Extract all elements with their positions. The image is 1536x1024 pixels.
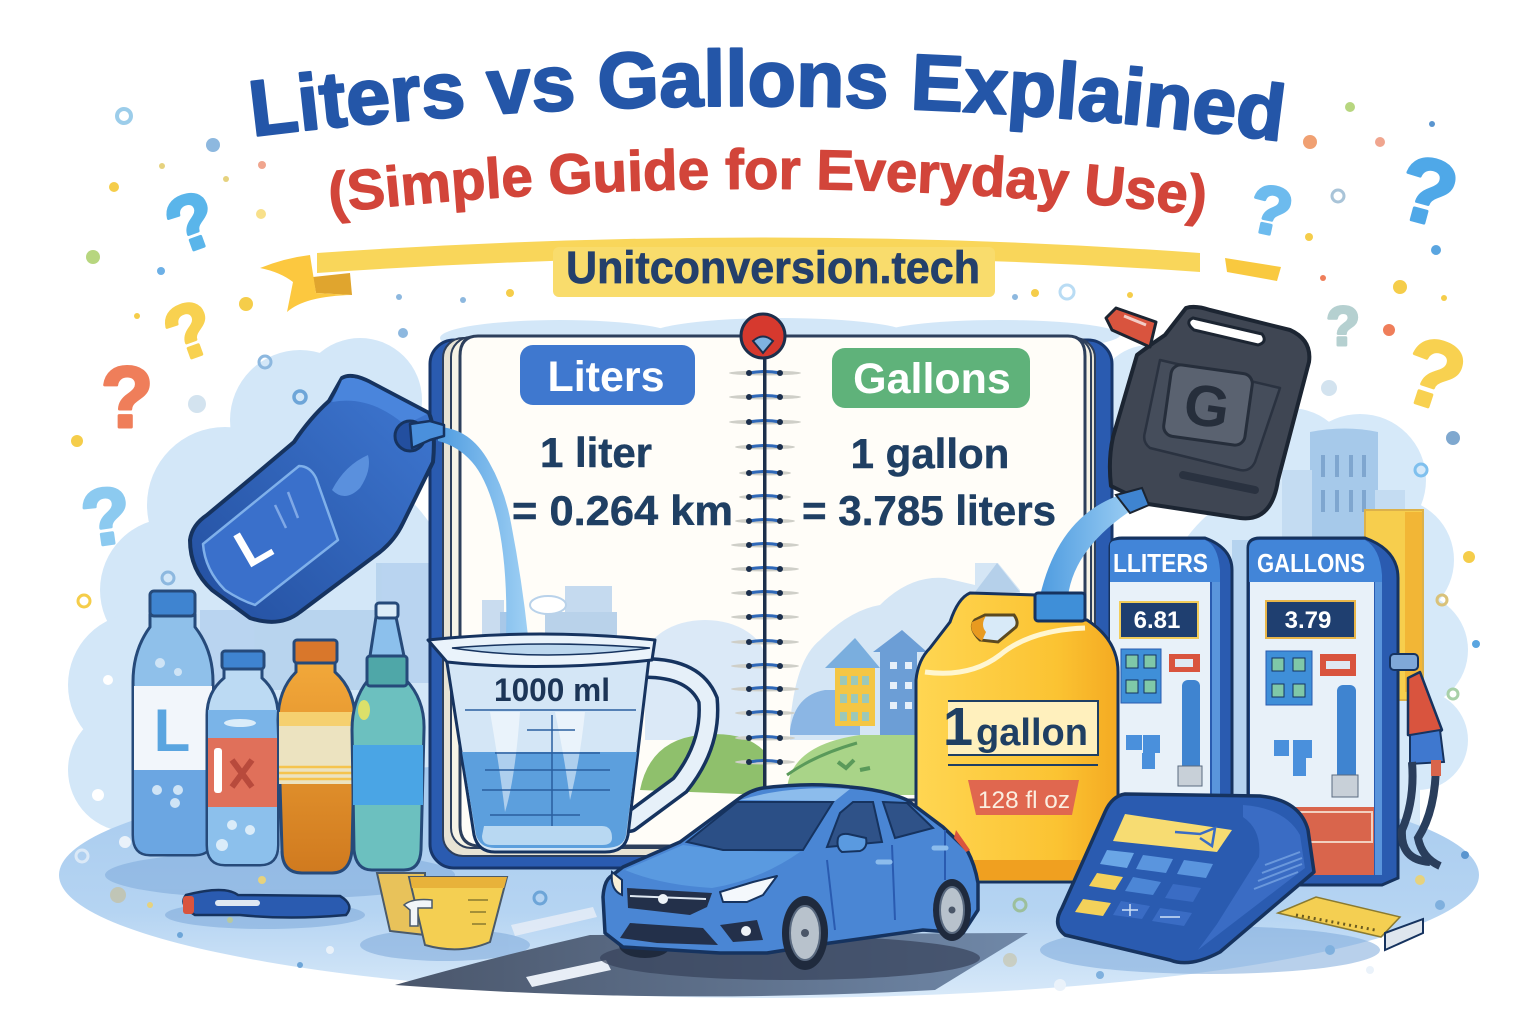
liter equation xyxy=(512,429,733,534)
road markings xyxy=(511,907,611,987)
Liters badge xyxy=(520,345,695,405)
letter L on jug: L xyxy=(225,513,282,579)
door lines xyxy=(827,830,945,930)
blue strap tool xyxy=(183,890,349,918)
background wash: right cloud xyxy=(1095,345,1468,840)
display xyxy=(1120,602,1198,638)
water xyxy=(462,752,637,848)
page stack xyxy=(443,338,1095,856)
spiral binding xyxy=(729,352,801,797)
fuel pump: gallons xyxy=(1248,538,1398,885)
roof highlight xyxy=(740,788,850,801)
question marks xyxy=(76,135,1477,564)
road xyxy=(395,933,1028,996)
calculator xyxy=(1058,794,1314,963)
128 fl oz tag: 128 fl oz xyxy=(978,787,1070,814)
display: 6.81 xyxy=(1134,607,1180,634)
red bookmark pin xyxy=(741,314,785,358)
fuel pump: liters xyxy=(1110,538,1232,830)
yellow measuring cups xyxy=(377,873,507,949)
red cap xyxy=(1106,308,1156,347)
G letter: G xyxy=(1180,371,1234,442)
screen xyxy=(1113,814,1232,852)
ribbon banner xyxy=(260,238,1281,312)
liter equation: = 0.264 km xyxy=(512,487,733,534)
side windows xyxy=(827,802,933,847)
headlight xyxy=(720,876,777,902)
title: Liters vs Gallons Explained xyxy=(250,47,1284,142)
ground xyxy=(59,752,1479,998)
mirror xyxy=(838,834,866,852)
windshield xyxy=(687,802,833,850)
measuring cup: 1000 ml xyxy=(494,672,610,708)
question marks: ? xyxy=(1326,295,1360,357)
display xyxy=(1266,601,1355,638)
Liters badge: Liters xyxy=(547,353,665,401)
handle xyxy=(630,668,708,822)
fuel nozzle and hose xyxy=(1390,654,1444,866)
background wash: left cloud xyxy=(68,338,460,840)
ground shadows xyxy=(105,851,1380,974)
128 fl oz tag xyxy=(968,780,1079,815)
scattered confetti dots xyxy=(71,102,1480,991)
water stream from blue jug xyxy=(438,427,528,636)
open page xyxy=(460,336,1085,846)
front wheel xyxy=(782,896,828,970)
far-side tire xyxy=(619,932,671,958)
question marks: ? xyxy=(154,172,229,271)
question marks: ? xyxy=(1243,169,1299,252)
question marks: ? xyxy=(1387,135,1468,248)
liter equation: 1 liter xyxy=(540,429,652,476)
bottle: water with L label: L xyxy=(154,697,190,764)
question marks: ? xyxy=(76,469,137,564)
cup tap xyxy=(404,900,432,926)
grille xyxy=(627,888,712,915)
measuring cup xyxy=(428,634,708,852)
gallon equation xyxy=(802,430,1056,534)
black jerrycan labelled G xyxy=(1106,307,1309,518)
bottle: red label xyxy=(207,651,278,865)
subtitle: (Simple Guide for Everyday Use) xyxy=(330,147,1205,227)
keypad xyxy=(1075,850,1213,926)
left side city skyline xyxy=(200,563,432,690)
question marks: ? xyxy=(153,284,226,379)
rear wheel xyxy=(933,879,971,941)
display: 3.79 xyxy=(1285,607,1331,634)
blue car xyxy=(603,785,978,970)
1 gallon label xyxy=(943,697,1098,765)
blue jug labelled L xyxy=(190,376,444,622)
right side city skyline xyxy=(1232,428,1423,810)
question marks: ? xyxy=(101,350,153,446)
left page scenery xyxy=(482,586,765,795)
notebook xyxy=(430,314,1112,868)
bottle: orange juice xyxy=(278,640,355,873)
car shadow on road xyxy=(600,936,980,980)
water stream from jerrycan xyxy=(1040,492,1138,596)
tail light xyxy=(954,830,970,852)
Gallons badge: Gallons xyxy=(853,355,1011,403)
fuel pump: liters: LLITERS xyxy=(1113,548,1208,578)
tape measure xyxy=(1278,897,1423,950)
gallon equation: 1 gallon xyxy=(851,430,1009,477)
jug spout xyxy=(395,421,444,451)
blue building xyxy=(873,630,927,738)
background wash: top of book xyxy=(440,318,1120,356)
website label: Unitconversion.tech xyxy=(566,242,980,293)
1 gallon label: gallon xyxy=(976,712,1088,754)
Gallons badge xyxy=(832,348,1030,408)
1 gallon label: 1 xyxy=(943,697,973,757)
bottle: water with L label xyxy=(133,591,213,855)
fuel pump: gallons: GALLONS xyxy=(1257,548,1365,578)
yellow gallon jug xyxy=(916,593,1118,882)
gallon equation: = 3.785 liters xyxy=(802,487,1056,534)
back cover xyxy=(430,340,1112,868)
yellow house xyxy=(825,638,880,726)
blue spout xyxy=(1116,488,1149,513)
bottle: teal with blue label xyxy=(352,603,424,870)
hood highlight xyxy=(625,845,800,888)
right page scenery xyxy=(787,563,1020,795)
question marks: ? xyxy=(1389,316,1477,434)
